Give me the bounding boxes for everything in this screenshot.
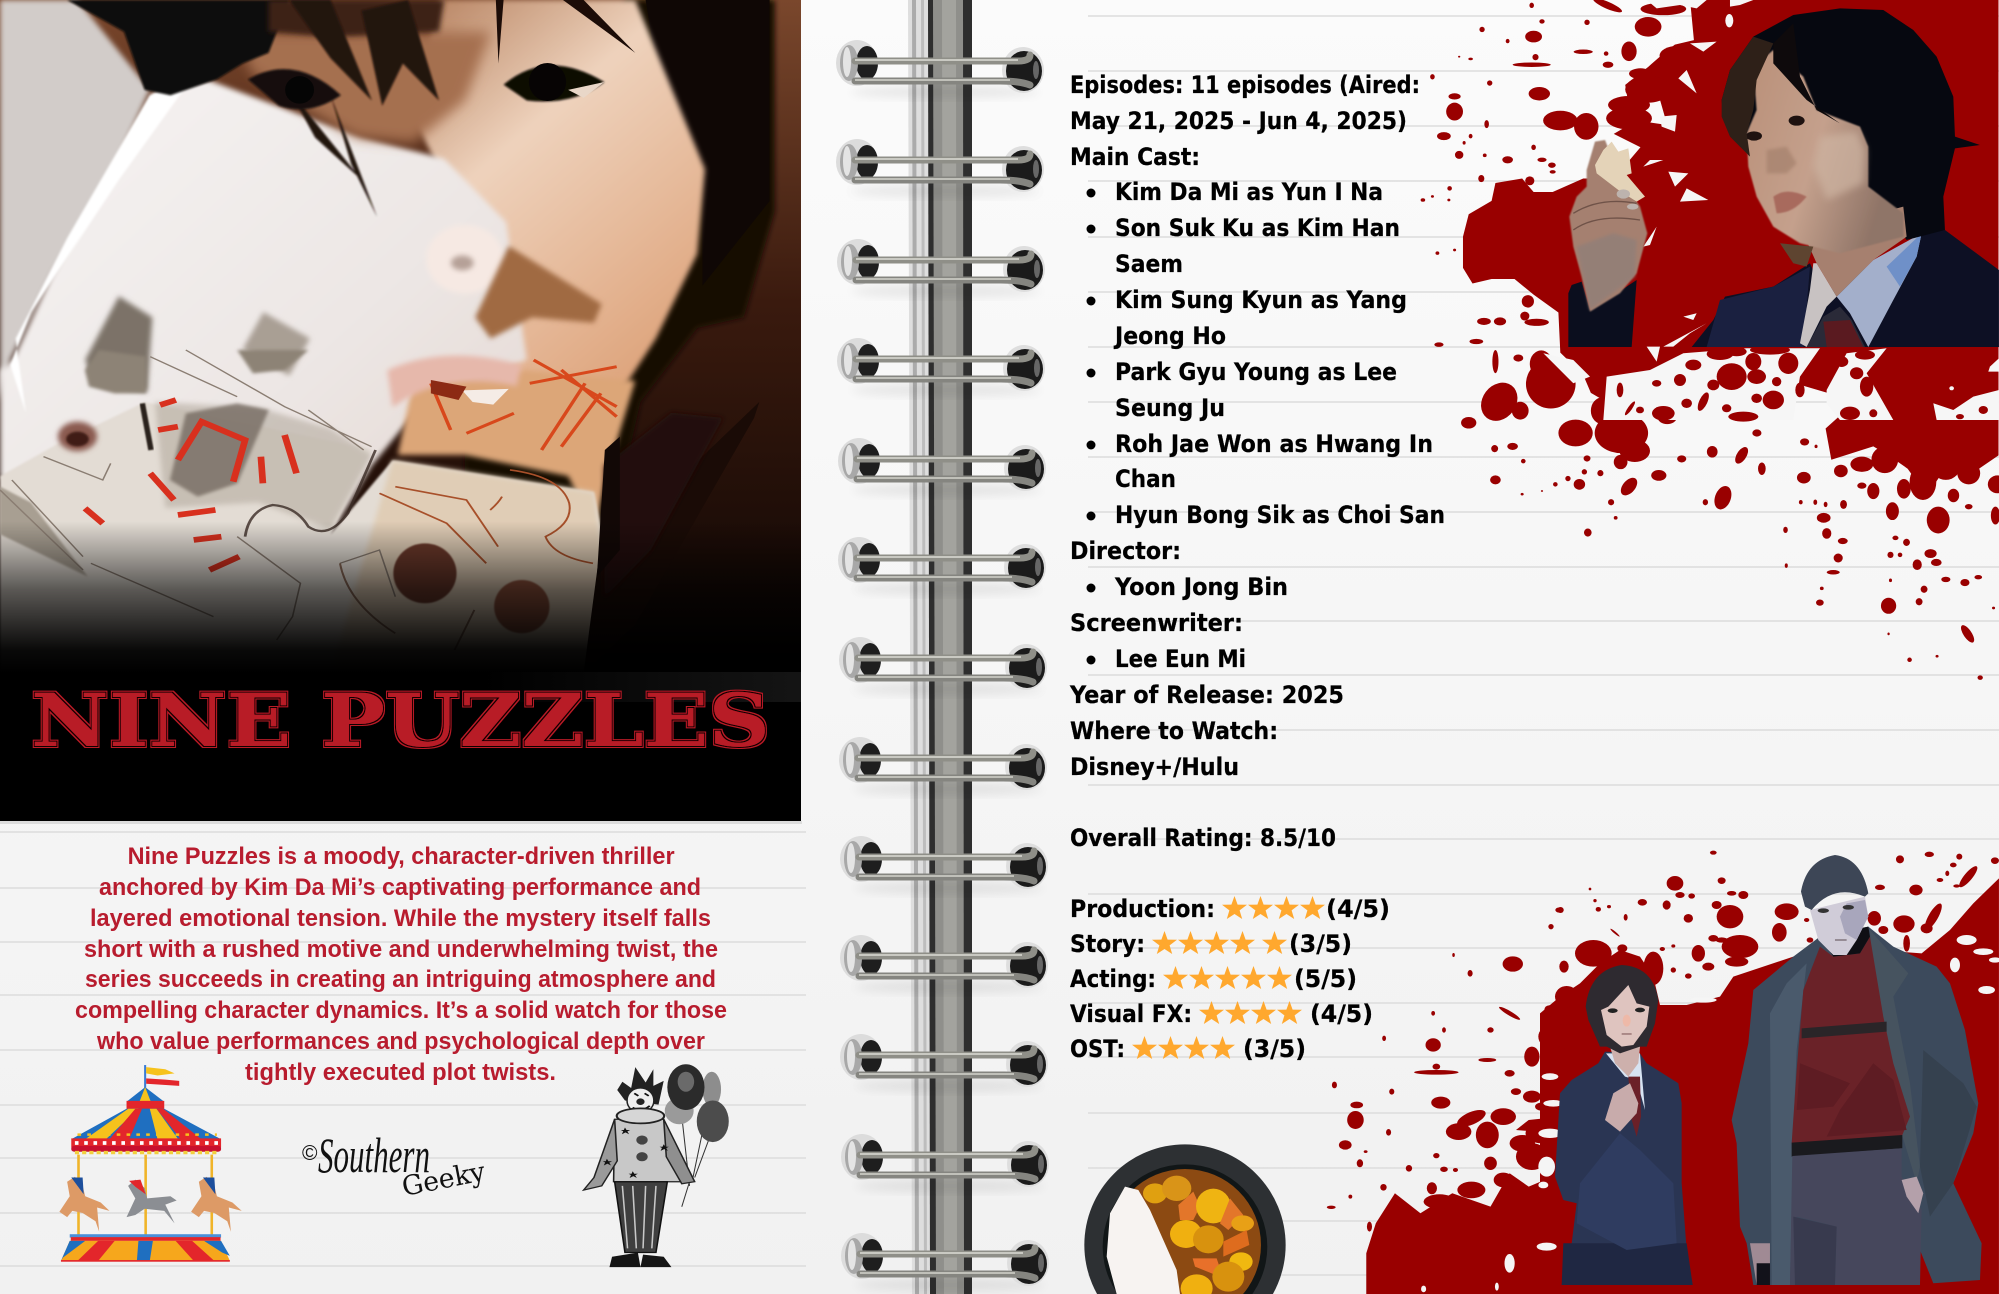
info list: show details: Director: xyxy=(1070,537,1181,565)
title: NINE PUZZLES xyxy=(31,678,770,764)
spiral rings xyxy=(836,40,1049,1291)
info list: show details xyxy=(1069,71,1445,781)
ratings list with stars: (3/5) xyxy=(1243,1035,1306,1063)
ratings list with stars: OST: xyxy=(1070,1035,1125,1063)
info list: show details: Jeong Ho xyxy=(1113,322,1226,350)
ratings list with stars: (4/5) xyxy=(1310,1000,1373,1028)
info list: show details: May 21, 2025 - Jun 4, 2025) xyxy=(1070,107,1407,135)
info list: show details: Kim Sung Kyun as Yang xyxy=(1115,286,1407,314)
photo: woman holding puzzle piece xyxy=(1568,8,1999,347)
info list: show details: Yoon Jong Bin xyxy=(1114,573,1288,601)
info list: show details: Year of Release: 2025 xyxy=(1069,681,1344,709)
head and beanie xyxy=(1820,927,1870,957)
info list: show details: Kim Da Mi as Yun I Na xyxy=(1115,178,1383,206)
ratings list with stars: Story: xyxy=(1070,930,1145,958)
illustration: woman in navy suit xyxy=(1555,965,1693,1285)
summary paragraph: who value performances and psychological depth over xyxy=(96,1028,705,1055)
info list: show details: Disney+/Hulu xyxy=(1070,753,1239,781)
ratings list with stars xyxy=(1070,895,1390,1063)
splatter: top right blood xyxy=(1421,0,1999,680)
suit xyxy=(1555,1052,1693,1285)
summary paragraph: tightly executed plot twists. xyxy=(245,1059,556,1086)
spiral binding spine xyxy=(908,0,972,1294)
head and hair xyxy=(1586,965,1658,1053)
info list: show details: Saem xyxy=(1115,250,1183,278)
ratings list with stars: Acting: xyxy=(1070,965,1156,993)
signature: Southern Geeky: Southern xyxy=(318,1127,430,1183)
belt and trousers xyxy=(1792,1135,1902,1157)
icon: carousel xyxy=(59,1065,242,1262)
sweater xyxy=(1792,937,1910,1143)
info list: show details: Hyun Bong Sik as Choi San xyxy=(1115,501,1445,529)
splatter: bottom left blood xyxy=(1327,907,1573,1294)
illustration: man in long coat xyxy=(1732,855,1982,1285)
signature: Southern Geeky: © xyxy=(302,1142,318,1165)
info list: show details: Park Gyu Young as Lee xyxy=(1115,358,1397,386)
poster photo panel xyxy=(0,0,802,821)
info list: show details: Main Cast: xyxy=(1070,143,1200,171)
puzzle sketch details xyxy=(0,350,620,650)
info list: show details: Chan xyxy=(1115,465,1176,493)
info list: show details: Episodes: 11 episodes (Aired: xyxy=(1070,71,1420,99)
ratings list with stars: Production: xyxy=(1070,895,1215,923)
sleeve and hand xyxy=(1568,140,1647,347)
ratings list with stars: (4/5) xyxy=(1326,895,1390,923)
icon: clown with balloons xyxy=(584,1064,729,1267)
info list: show details: Lee Eun Mi xyxy=(1115,645,1246,673)
coat xyxy=(1732,927,1982,1285)
ratings list with stars: Visual FX: xyxy=(1070,1000,1192,1028)
overall rating: Overall Rating: 8.5/10 xyxy=(1070,824,1336,852)
icon: curry bowl xyxy=(1084,1144,1286,1294)
info list: show details: Roh Jae Won as Hwang In xyxy=(1115,430,1433,458)
summary paragraph: series succeeds in creating an intriguing atmosphere and xyxy=(85,966,716,993)
summary paragraph: short with a rushed motive and underwhelming twist, the xyxy=(84,936,718,963)
signature: Southern Geeky: Geeky xyxy=(399,1156,489,1203)
jacket and shirt xyxy=(1692,230,1999,347)
summary paragraph: layered emotional tension. While the mystery itself falls xyxy=(90,905,711,932)
signature: Southern Geeky xyxy=(302,1127,489,1203)
face and neck xyxy=(1722,23,1907,297)
summary paragraph: anchored by Kim Da Mi’s captivating performance and xyxy=(99,874,701,901)
info list: show details: Screenwriter: xyxy=(1070,609,1243,637)
info list: show details: Son Suk Ku as Kim Han xyxy=(1115,214,1400,242)
ratings list with stars: (3/5) xyxy=(1289,930,1352,958)
splatter: white lacework within blood xyxy=(1543,0,1999,422)
splatter: bottom right blood xyxy=(1537,851,1999,1294)
ratings list with stars: (5/5) xyxy=(1294,965,1357,993)
hair back xyxy=(1722,8,1980,240)
summary paragraph: compelling character dynamics. It’s a solid watch for those xyxy=(75,997,727,1024)
summary paragraph xyxy=(75,843,727,1086)
info list: show details: Seung Ju xyxy=(1115,394,1225,422)
info list: show details: Where to Watch: xyxy=(1070,717,1278,745)
summary paragraph: Nine Puzzles is a moody, character-driven thriller xyxy=(128,843,675,870)
